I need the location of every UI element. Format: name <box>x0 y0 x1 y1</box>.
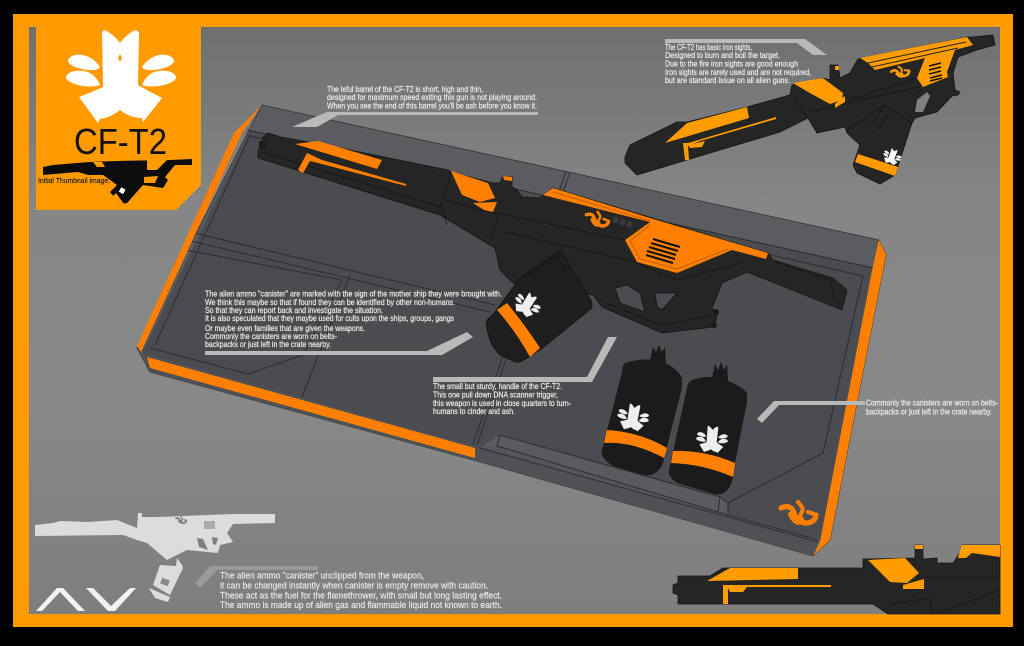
callout text <box>327 85 537 110</box>
title: CF-T2 <box>74 121 167 162</box>
callout text <box>220 570 502 611</box>
callout: iron sights <box>665 39 827 85</box>
vent slots <box>929 63 942 81</box>
standing canister right <box>669 362 747 495</box>
crate orange trim bottom <box>147 357 475 458</box>
callout text: The small but sturdy, handle of the CF-T2. <box>433 382 562 391</box>
callout text: The alien ammo "canister" are marked with the sign of the mother ship they were brought with. <box>205 290 502 298</box>
callout text: this weapon is used in close quarters to turn- <box>433 399 571 408</box>
callout: handle <box>433 337 617 416</box>
top orange rail and panel <box>860 37 973 87</box>
callout text <box>866 398 998 416</box>
white gun silhouette <box>35 513 275 602</box>
callout: unclipped canister <box>195 566 502 611</box>
front orange block <box>451 171 495 202</box>
rail grooves <box>868 42 966 67</box>
barrel orange stripe <box>295 141 382 169</box>
callout text: it can be changed instantly when canister is empty remove with caution. <box>220 580 488 592</box>
callout text: Designed to burn and boil the target. <box>665 51 780 60</box>
icon: canister emblem <box>509 288 545 322</box>
callout: canister sign <box>205 290 502 355</box>
lower orange block <box>473 202 497 212</box>
callout text: Due to the fire iron sights are good enough <box>665 60 798 68</box>
barrel orange stripe <box>665 107 749 143</box>
barrel orange L <box>298 153 406 186</box>
canister mark <box>160 578 170 586</box>
callout text: It is also speculated that they maybe used for cults upon the ships, groups, gangs <box>205 314 454 323</box>
icon: alien emblem <box>66 30 176 123</box>
icon: crate swirl emblem <box>781 502 816 523</box>
callout text: backpacks or just left in the crate nearby. <box>866 408 992 416</box>
standing canister left <box>602 345 682 475</box>
crate orange trim left <box>137 105 262 352</box>
callout text: designed for maximum speed exiting this gun is not playing around. <box>327 93 537 102</box>
white canister <box>153 558 183 595</box>
crate front step <box>480 446 818 542</box>
bottom right gun detail <box>673 545 1000 614</box>
top orange rail and panel <box>543 188 768 273</box>
crate front face <box>142 353 818 556</box>
panel: weapon crate <box>137 105 886 556</box>
callout text: Commonly the canisters are worn on belts- <box>866 398 998 408</box>
callout text: When you see the end of this barrel you'll be ash before you know it. <box>327 102 537 110</box>
top right gun view <box>625 35 995 184</box>
callout text: but are standard issue on all alien guns. <box>665 76 790 85</box>
icon: gun swirl emblem <box>585 211 609 226</box>
gun body <box>625 35 995 184</box>
thumbnail caption: Initial Thumbnail image. <box>38 176 110 185</box>
front orange block <box>868 558 919 583</box>
callout text: We think this maybe so that if found they can be identified by other non-humans. <box>205 298 455 307</box>
callout text: humans to cinder and ash. <box>433 407 515 416</box>
callout text <box>205 290 502 349</box>
canister nozzle <box>712 362 728 381</box>
trigger guard openings <box>615 285 677 312</box>
callout text: This one pull down DNA scanner trigger, <box>433 390 558 400</box>
callout text: The CF-T2 has basic iron sights, <box>665 43 752 52</box>
callout text: The alien ammo "canister" unclipped from the weapon, <box>220 570 424 582</box>
trigger opening <box>915 92 930 112</box>
thumbnail gun silhouette <box>43 159 192 205</box>
callout: belts <box>757 398 998 423</box>
crate base <box>137 105 886 556</box>
canister band <box>604 430 667 458</box>
crate front ledge <box>497 435 720 512</box>
rear pins <box>713 309 719 315</box>
side buttons <box>612 217 633 228</box>
sight tip <box>835 66 839 70</box>
vent slots <box>646 239 680 263</box>
muzzle nub <box>259 141 266 149</box>
silhouette openings <box>197 538 208 550</box>
detail lines <box>795 78 920 130</box>
crate panel lines <box>150 130 873 542</box>
callout text <box>665 43 811 85</box>
callout text: The leful barrel of the CF-T2 is short, high and thin, <box>327 85 483 94</box>
icon: canister emblem <box>615 402 651 434</box>
gun body <box>258 133 847 333</box>
barrel orange stripe <box>707 568 798 581</box>
callout text: Commonly the canisters are worn on belts- <box>205 332 337 341</box>
crate interior <box>142 130 872 540</box>
lower front orange <box>835 96 845 108</box>
icon: magazine emblem <box>881 146 904 167</box>
canister band <box>671 451 735 477</box>
AV logo <box>36 588 136 611</box>
detail lines <box>890 578 1000 614</box>
icon: silhouette swirl <box>176 517 186 523</box>
canister nozzle <box>650 345 666 363</box>
icon: gun swirl emblem <box>890 64 910 79</box>
barrel orange line <box>723 585 831 604</box>
panel: title badge <box>36 27 201 210</box>
front orange block <box>793 78 843 104</box>
magazine band <box>855 154 898 176</box>
callout: barrel <box>292 85 538 127</box>
callout text <box>433 382 571 416</box>
lug orange <box>688 141 705 148</box>
sight tip <box>503 176 512 181</box>
callout text: These act as the fuel for the flamethrower, with small but long lasting effect. <box>220 590 502 602</box>
callout text: Or maybe even families that are given the weapons. <box>205 324 365 333</box>
gun detail lines <box>262 152 835 326</box>
canister orange band <box>497 303 540 357</box>
barrel orange line <box>683 117 776 160</box>
icon: canister emblem <box>695 425 729 454</box>
callout text: The ammo is made up of alien gas and flammable liquid not known to earth. <box>220 600 502 611</box>
canister panel lines <box>517 255 565 280</box>
sight tip <box>915 545 923 549</box>
gun body <box>673 545 1000 614</box>
crate orange trim right <box>813 240 886 556</box>
callout text: So that they can report back and investigate the situation. <box>205 306 383 315</box>
attached canister <box>486 250 592 362</box>
callout text: Iron sights are rarely used and are not required, <box>665 68 811 77</box>
lower orange block <box>903 579 924 589</box>
callout text: backpacks or just left in the crate nearby. <box>205 340 331 349</box>
main gun <box>258 133 847 362</box>
top orange rail <box>958 545 1000 558</box>
